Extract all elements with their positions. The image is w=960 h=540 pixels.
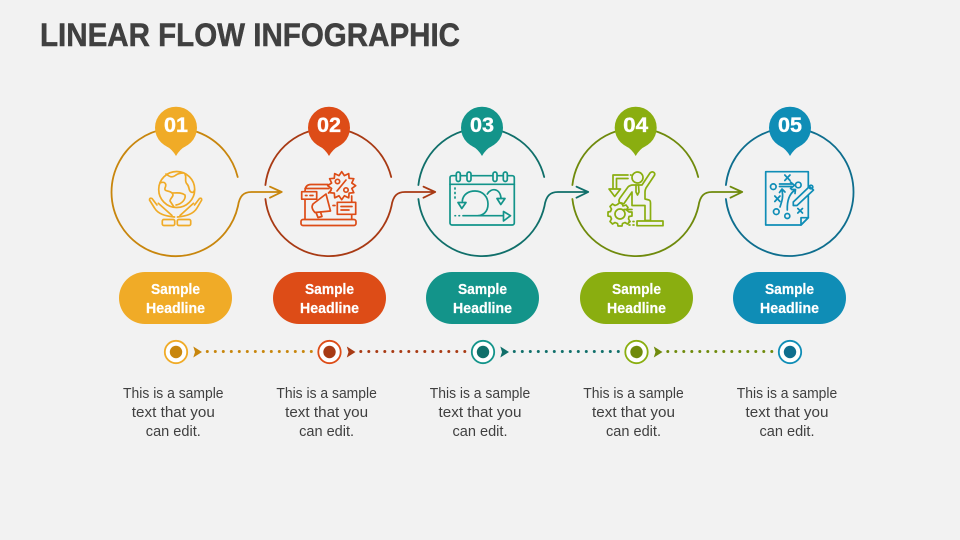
body text 05: can edit.: [760, 424, 814, 440]
headline pill 02: Headline: [300, 301, 359, 317]
icon: person climbing with gear: [608, 172, 663, 226]
body text 01: [123, 386, 224, 440]
icon: globe in hands: [150, 172, 202, 226]
body text 05: text that you: [746, 405, 828, 421]
timeline marker 04: [625, 341, 772, 363]
body text 02: [276, 386, 377, 440]
headline pill 05: [733, 272, 846, 324]
headline pill 04: Sample: [612, 282, 661, 298]
headline pill 02: [273, 272, 386, 324]
number pin 03: 03: [470, 114, 494, 137]
body text 04: text that you: [592, 405, 675, 421]
timeline marker 01: [165, 341, 312, 363]
body text 01: This is a sample: [123, 386, 224, 402]
body text 01: text that you: [132, 405, 215, 421]
circle connector 03: [418, 128, 588, 256]
headline pill 01: Headline: [146, 301, 205, 317]
body text 01: can edit.: [146, 424, 201, 440]
headline pill 02: Sample: [305, 282, 354, 298]
icon: calendar with process loop: [450, 172, 514, 225]
headline pill 05: Sample: [765, 282, 814, 298]
body text 04: [583, 386, 684, 440]
number pin 01: 01: [164, 114, 188, 137]
circle connector 01: [112, 128, 282, 256]
panel: step 01: [112, 107, 312, 440]
body text 03: can edit.: [452, 424, 508, 440]
number pin 05: 05: [778, 114, 802, 137]
circle connector 02: [265, 128, 435, 256]
body text 02: can edit.: [299, 424, 354, 440]
panel: step 02: [265, 107, 466, 440]
headline pill 05: Headline: [760, 301, 819, 317]
body text 03: This is a sample: [430, 386, 530, 402]
body text 04: can edit.: [606, 424, 661, 440]
icon: strategy plan on paper: [766, 172, 814, 225]
body text 05: [737, 386, 837, 440]
body text 03: text that you: [438, 405, 522, 421]
timeline marker 03: [472, 341, 619, 363]
timeline marker 05: [779, 341, 801, 363]
number pin 03: [461, 107, 503, 156]
body text 05: This is a sample: [737, 386, 837, 402]
headline pill 04: Headline: [607, 301, 666, 317]
headline pill 03: Headline: [453, 301, 512, 317]
icon: marketing laptop and discount badge: [301, 172, 356, 226]
headline pill 01: [119, 272, 232, 324]
panel: step 05: [726, 107, 854, 440]
number pin 02: [308, 107, 350, 156]
number pin 04: [615, 107, 657, 156]
timeline marker 02: [318, 341, 466, 363]
body text 03: [430, 386, 530, 440]
body text 02: This is a sample: [276, 386, 377, 402]
number pin 02: 02: [317, 114, 341, 137]
body text 02: text that you: [285, 405, 368, 421]
number pin 04: 04: [623, 114, 649, 137]
headline pill 01: Sample: [151, 282, 200, 298]
panel: step 04: [572, 107, 772, 440]
number pin 05: [769, 107, 811, 156]
body text 04: This is a sample: [583, 386, 684, 402]
headline pill 03: Sample: [458, 282, 507, 298]
circle connector 04: [572, 128, 742, 256]
circle outline 05: [726, 128, 854, 256]
title: LINEAR FLOW INFOGRAPHIC: [40, 17, 460, 53]
headline pill 04: [580, 272, 693, 324]
headline pill 03: [426, 272, 539, 324]
number pin 01: [155, 107, 197, 156]
panel: step 03: [418, 107, 619, 440]
